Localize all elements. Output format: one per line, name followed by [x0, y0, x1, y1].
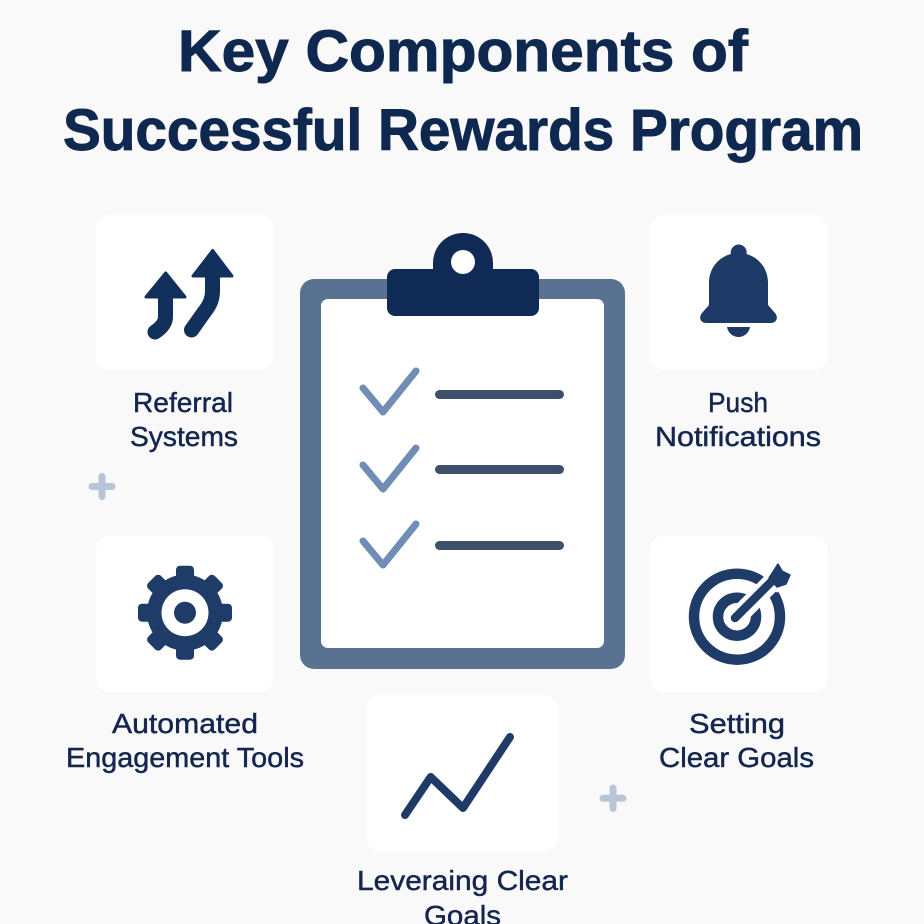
- label: referral systems: [130, 387, 238, 452]
- panel: push notifications: [650, 215, 828, 452]
- icon: clipboard: [300, 233, 625, 669]
- label: automated engagement tools: Automated: [112, 708, 258, 739]
- checklist item 1: [363, 371, 560, 412]
- title: [63, 19, 863, 163]
- icon: two upward arrows: [146, 250, 232, 332]
- clipboard board: [300, 279, 625, 669]
- title: Successful Rewards Program: [63, 98, 863, 163]
- icon: target with arrow: [694, 562, 791, 660]
- label: push notifications: Push: [708, 387, 768, 418]
- label: setting clear goals: Clear Goals: [659, 742, 814, 773]
- card: leveraging clear goals: [366, 695, 558, 851]
- label: leveraging clear goals: [357, 865, 568, 924]
- icon: line chart: [405, 737, 510, 815]
- label: setting clear goals: Setting: [689, 708, 785, 739]
- card: push notifications: [650, 215, 828, 370]
- panel: automated engagement tools: [66, 536, 304, 773]
- checklist item 2: [363, 448, 560, 489]
- card: setting clear goals: [650, 536, 828, 692]
- title: Key Components of: [178, 19, 749, 84]
- icon: bell: [700, 244, 777, 337]
- label: push notifications: Notifications: [655, 421, 821, 452]
- card: automated engagement tools: [96, 536, 274, 692]
- icon: plus left: [92, 476, 112, 496]
- icon: plus bottom right: [603, 788, 623, 808]
- label: leveraging clear goals: Leveraing Clear: [357, 865, 568, 896]
- clipboard paper: [321, 299, 604, 648]
- label: referral systems: Referral: [133, 387, 233, 418]
- label: automated engagement tools: Engagement Tools: [66, 742, 304, 773]
- label: automated engagement tools: [66, 708, 304, 773]
- checklist item 3: [363, 524, 560, 565]
- label: referral systems: Systems: [130, 421, 238, 452]
- label: push notifications: [655, 387, 821, 452]
- panel: referral systems: [96, 215, 274, 452]
- icon: gear: [138, 566, 232, 660]
- panel: setting clear goals: [650, 536, 828, 773]
- clipboard clip: [387, 233, 539, 316]
- panel: leveraging clear goals: [357, 695, 568, 924]
- card: referral systems: [96, 215, 274, 370]
- label: setting clear goals: [659, 708, 814, 773]
